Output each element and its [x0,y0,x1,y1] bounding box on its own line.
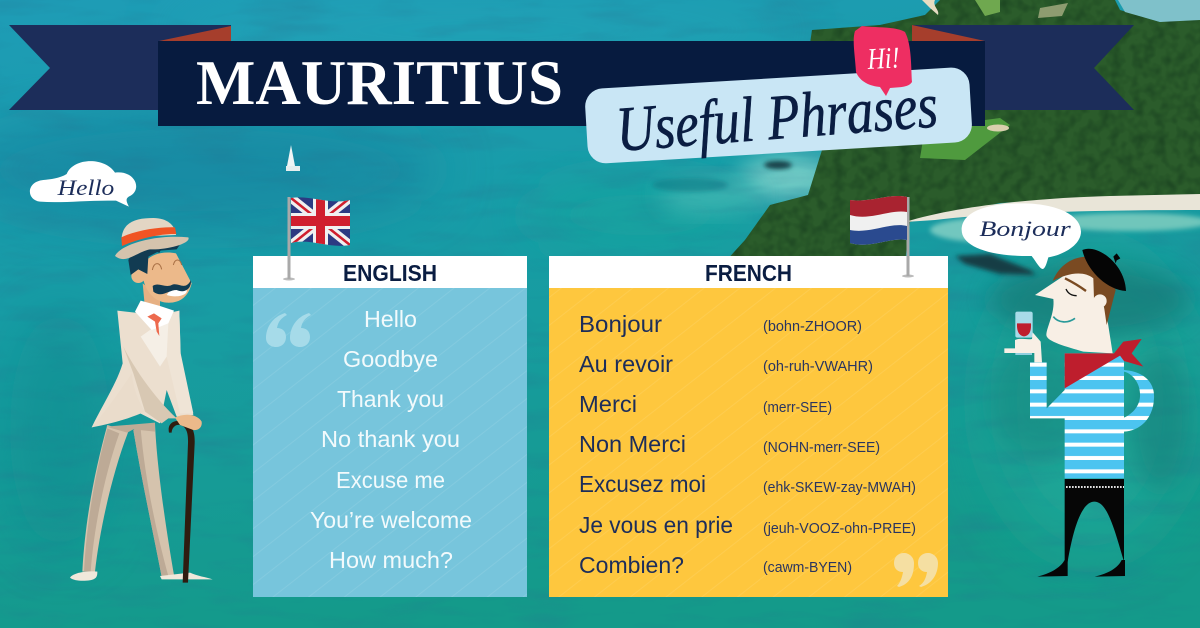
trousers [1065,479,1124,562]
title: MAURITIUS [196,47,563,118]
pronunciation list: (NOHN-merr-SEE) [763,440,880,456]
panel header: French [549,256,948,288]
speech bubble: Hi!: Hi! [866,41,900,76]
panel body: French [549,288,948,597]
lower right lagoon tint [1023,338,1151,533]
neck and face [1035,257,1116,353]
heading: French: FRENCH [705,260,792,286]
banner ribbon: right tail [912,25,1134,110]
character: English gentleman [30,161,213,583]
neck [143,283,160,308]
English phrase list: Hello [364,306,417,332]
English phrase list: No thank you [321,426,460,452]
shoes [70,571,97,581]
subtitle label: useful phrases: Useful Phrases [614,69,940,165]
hat [115,218,189,259]
pronunciation list: (ehk-SKEW-zay-MWAH) [763,480,916,496]
sailing boat [286,145,300,171]
island vegetation [730,0,1200,256]
pronunciation list: (bohn-ZHOOR) [763,319,862,335]
speech bubble: Hello: Hello [57,175,114,200]
speech bubble: Hello [30,161,136,207]
beret [1082,249,1126,291]
English phrase list: How much? [329,547,453,573]
trousers [82,423,174,577]
French phrase list: Bonjour [579,311,662,337]
banner ribbon: left tail [9,25,231,110]
shirt and tie [135,301,174,336]
panel: French [549,256,948,597]
pronunciation list: (cawm-BYEN) [763,560,852,576]
panel header: English [253,256,527,288]
hand [175,415,202,430]
walking cane [169,421,195,583]
pronunciation list [763,319,916,576]
flag: France (as drawn) [850,190,914,278]
English phrase list [310,306,472,573]
jacket [92,311,193,427]
French phrase list: Au revoir [579,351,673,377]
French phrase list: Je vous en prie [579,512,733,538]
English phrase list: Excuse me [336,467,445,493]
French phrase list: Non Merci [579,431,686,457]
pronunciation list: (merr-SEE) [763,400,832,416]
flag: United Kingdom [283,195,351,280]
pronunciation list: (oh-ruh-VWAHR) [763,359,873,375]
opening quote mark [266,313,311,347]
pronunciation list: (jeuh-VOOZ-ohn-PREE) [763,521,916,537]
neck scarf [1065,339,1143,388]
English phrase list: Goodbye [343,346,438,372]
French phrase list: Excusez moi [579,471,706,497]
shoes [1037,560,1068,577]
banner main band [158,41,985,126]
English phrase list: You’re welcome [310,507,472,533]
character: French man [962,203,1154,577]
French phrase list: Combien? [579,552,684,578]
panel body: English [253,288,527,597]
English phrase list: Thank you [337,386,444,412]
speech bubble: Hi! [854,26,912,96]
head [128,242,192,303]
speech bubble: Bonjour: Bonjour [979,216,1071,241]
heading: English: ENGLISH [343,260,437,286]
closing quote mark [894,553,938,587]
striped shirt [1030,353,1154,478]
speech bubble: Bonjour [962,203,1081,269]
French phrase list [579,311,733,578]
belt stitching [1066,484,1124,489]
panel: English [253,256,527,597]
beach [905,194,1200,222]
hand holding glass [1004,332,1042,362]
French phrase list: Merci [579,391,637,417]
wine glass [1015,312,1033,355]
